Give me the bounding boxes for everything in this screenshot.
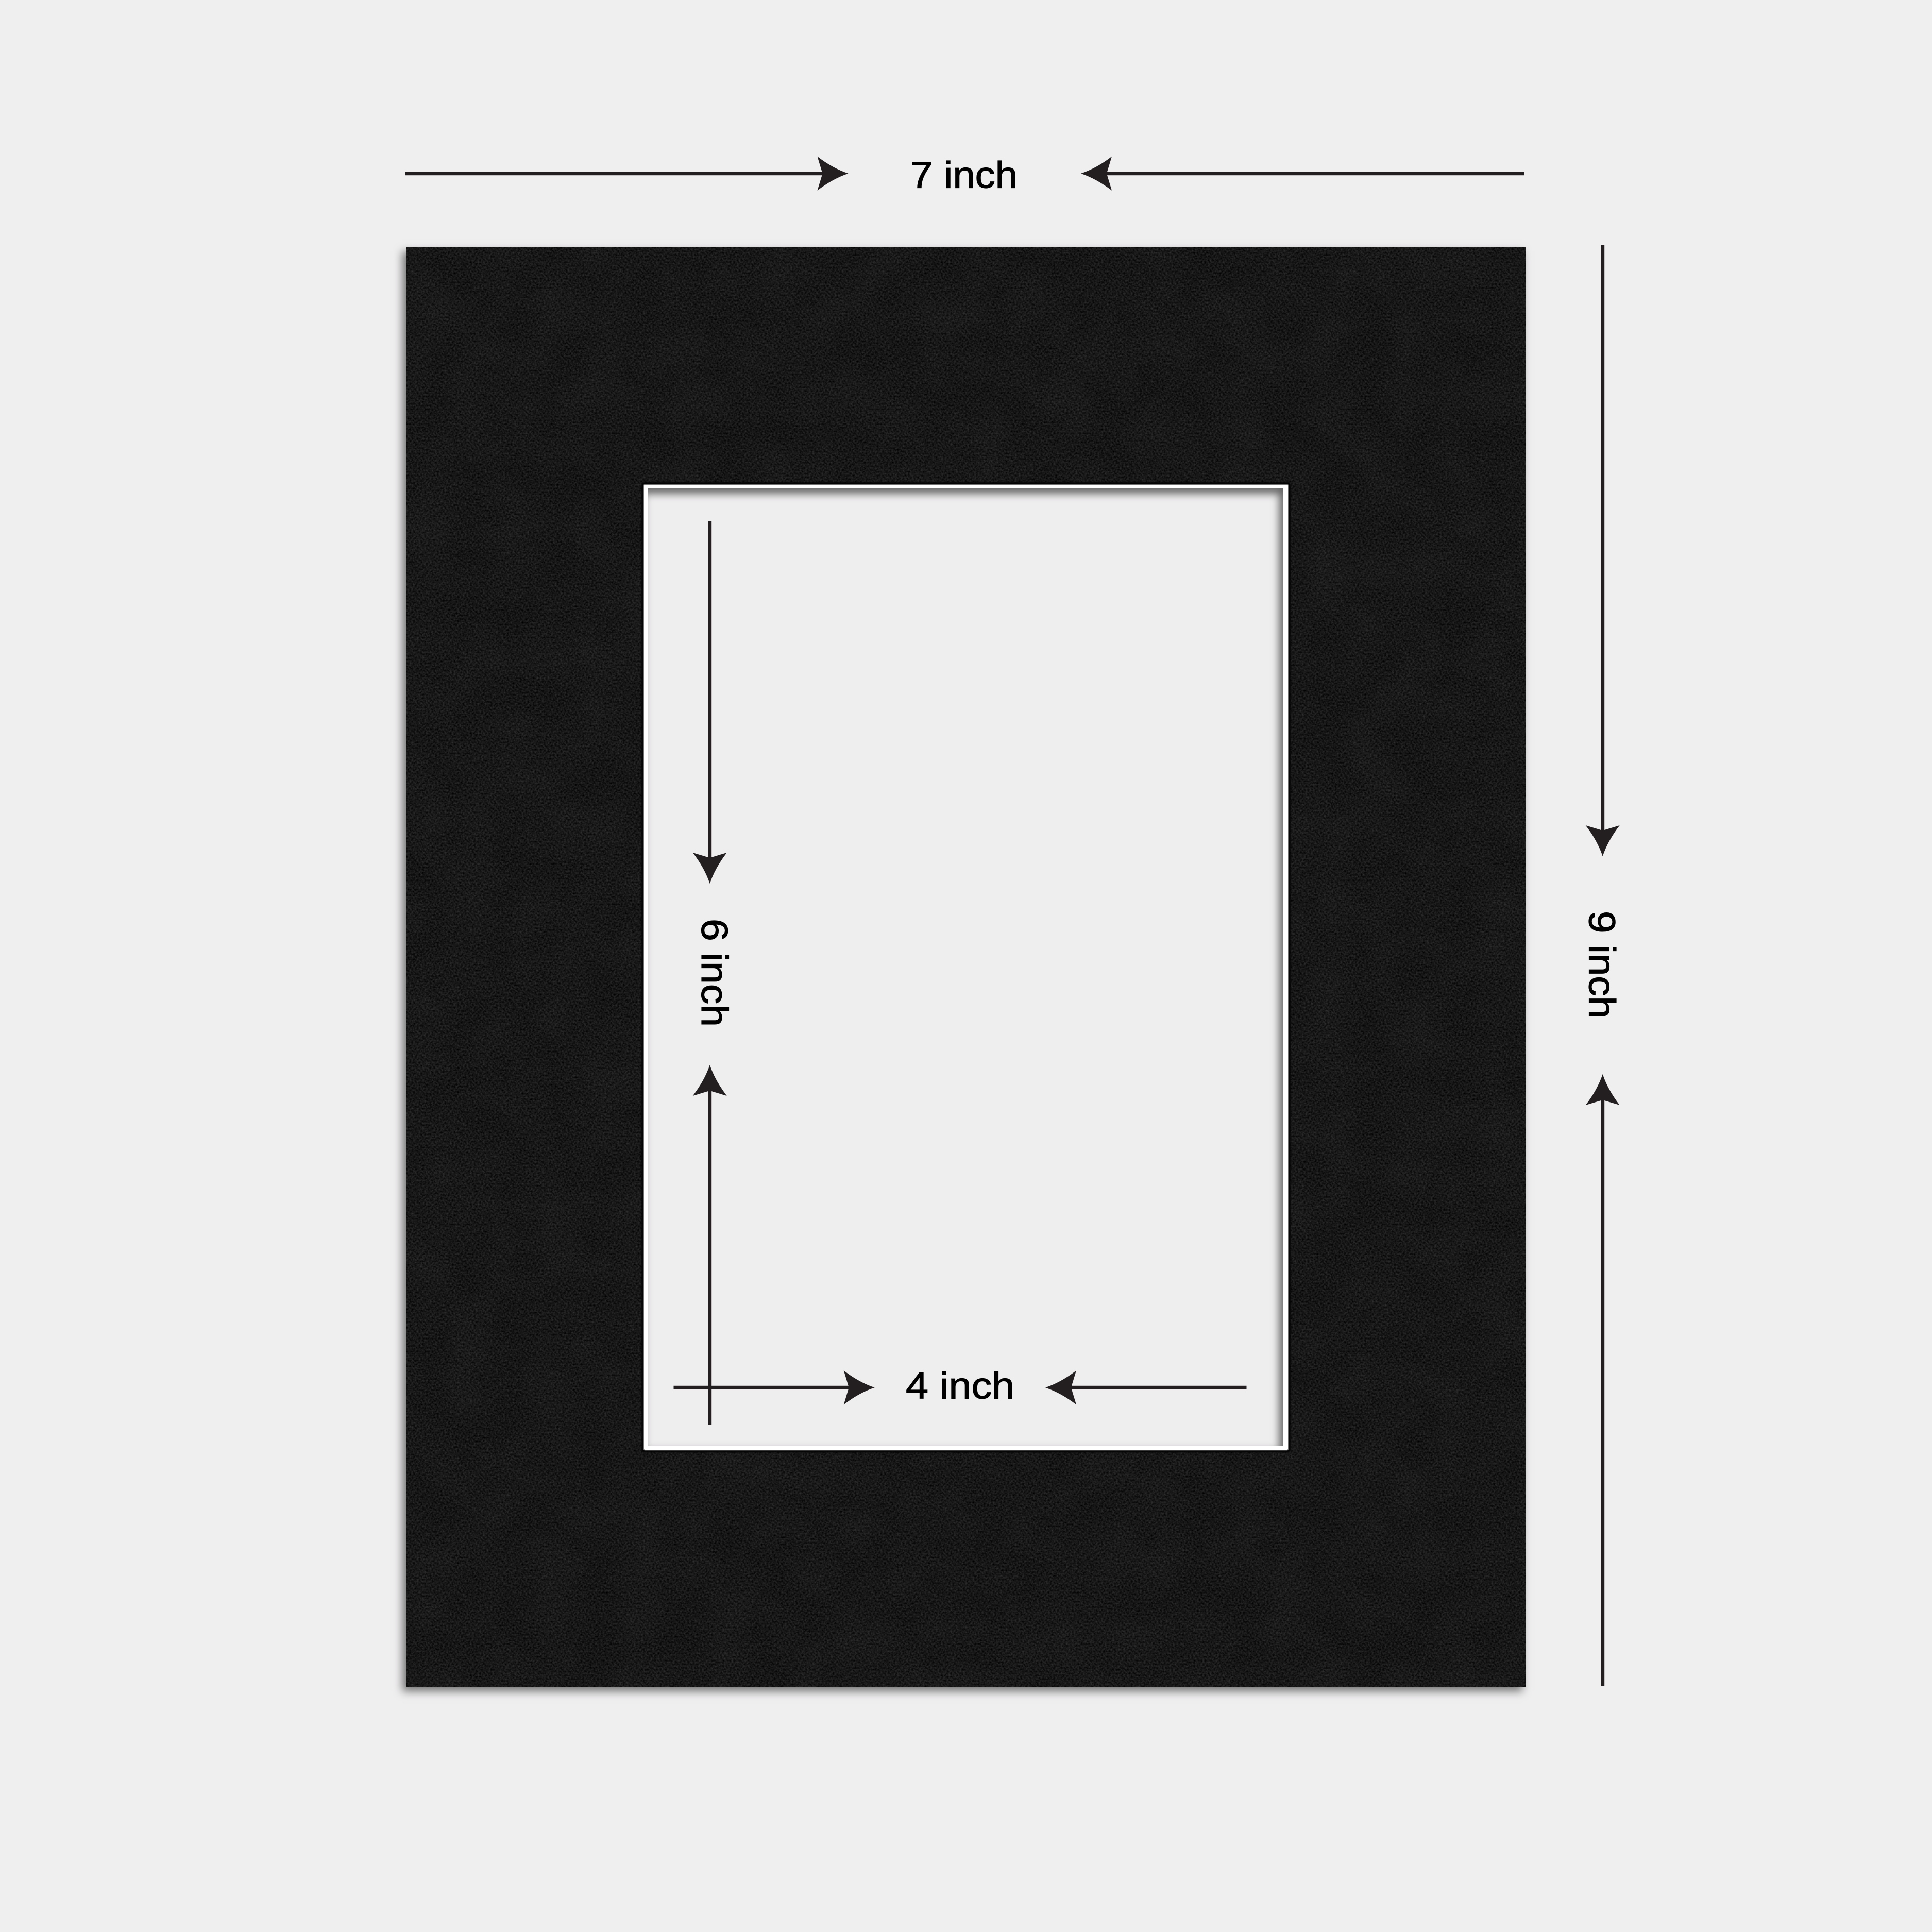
arrow: opening width, pointing left <box>1045 1370 1247 1404</box>
label: 7 inch: 7 inch <box>910 155 1018 196</box>
label: 9 inch: 9 inch <box>1581 911 1622 1019</box>
label: 4 inch: 4 inch <box>906 1366 1014 1407</box>
panel: mat window opening <box>648 488 1283 1446</box>
arrow: opening height, pointing up <box>693 1065 727 1425</box>
white bevel of the mat window <box>644 485 1288 1450</box>
panel: black mat board <box>406 247 1526 1687</box>
arrow: opening width, pointing right <box>674 1370 875 1404</box>
arrow: opening height, pointing down <box>693 521 727 884</box>
arrow: top width, pointing right <box>405 157 848 191</box>
arrow: outer height, pointing up <box>1586 1074 1620 1686</box>
label: 6 inch: 6 inch <box>693 919 735 1027</box>
arrow: outer height, pointing down <box>1586 245 1620 856</box>
arrow: top width, pointing left <box>1081 157 1524 191</box>
